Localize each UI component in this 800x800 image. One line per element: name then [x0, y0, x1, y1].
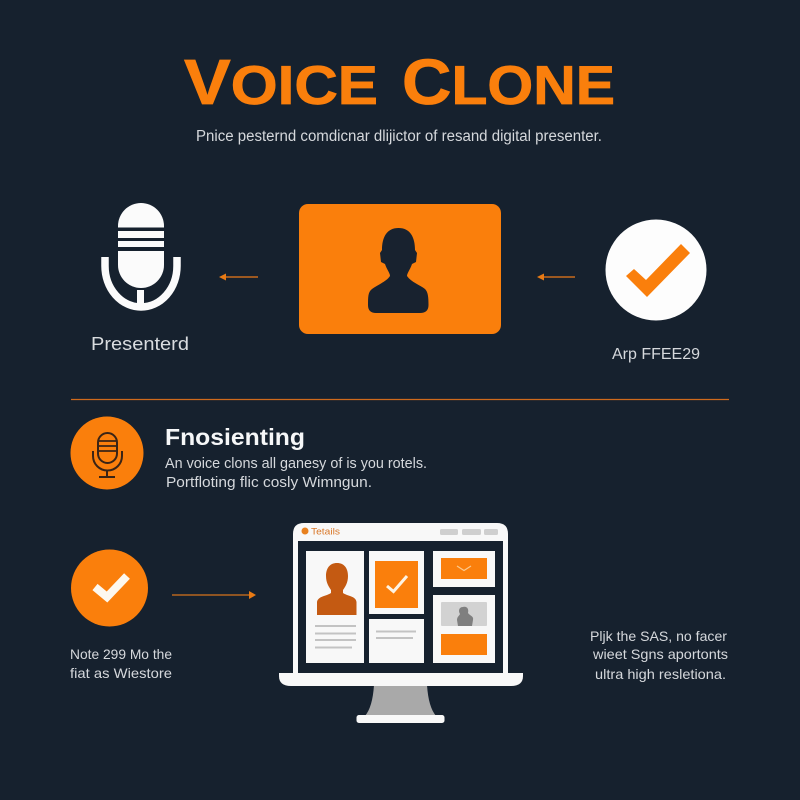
- title: VOICE: [184, 46, 378, 118]
- text block: section description: An voice clons all ganesy of is you rotels.: [165, 456, 427, 472]
- monitor bezel and screen: [293, 523, 508, 675]
- card: profile: [306, 551, 364, 663]
- heading: section: Fnosienting: [165, 424, 305, 450]
- text block: section description: Portfloting flic cosly Wimngun.: [166, 475, 372, 491]
- icon: orange check circle: [71, 550, 148, 626]
- label: presenter: Presenterd: [91, 333, 189, 354]
- card: check: [369, 551, 424, 614]
- label: app code: Arp FFEE29: [612, 346, 700, 363]
- browser logo and name: [302, 526, 341, 536]
- icon: microphone: [105, 203, 177, 308]
- text block: note: [70, 646, 172, 681]
- title: [184, 46, 615, 118]
- card: media: [433, 595, 495, 663]
- text block: right note: ultra high resletiona.: [595, 666, 726, 682]
- monitor stand: [365, 685, 436, 716]
- icon: white check circle: [606, 220, 706, 320]
- monitor base bar: [279, 673, 523, 686]
- arrow: left from check to card: [537, 274, 575, 280]
- text block: right note: Pljk the SAS, no facer: [590, 628, 727, 644]
- arrow: left from card to microphone: [219, 274, 258, 280]
- text block: note: fiat as Wiestore: [70, 665, 172, 681]
- card: text lines: [369, 619, 424, 663]
- toolbar buttons: [440, 529, 498, 535]
- card: mail: [433, 551, 495, 587]
- panel: orange presenter card: [299, 204, 501, 334]
- browser logo and name: Tetails: [311, 526, 341, 536]
- title: CLONE: [402, 46, 615, 118]
- subtitle: Pnice pesternd comdicnar dlijictor of resand digital presenter.: [196, 128, 602, 145]
- text block: section description: [165, 456, 427, 491]
- text block: note: Note 299 Mo the: [70, 646, 172, 662]
- monitor illustration: [279, 523, 523, 723]
- arrow: right to monitor: [172, 591, 256, 599]
- text block: right note: [590, 628, 728, 682]
- text block: right note: wieet Sgns aportonts: [592, 646, 728, 662]
- icon: person silhouette: [368, 228, 428, 313]
- icon: orange microphone circle: [70, 416, 144, 490]
